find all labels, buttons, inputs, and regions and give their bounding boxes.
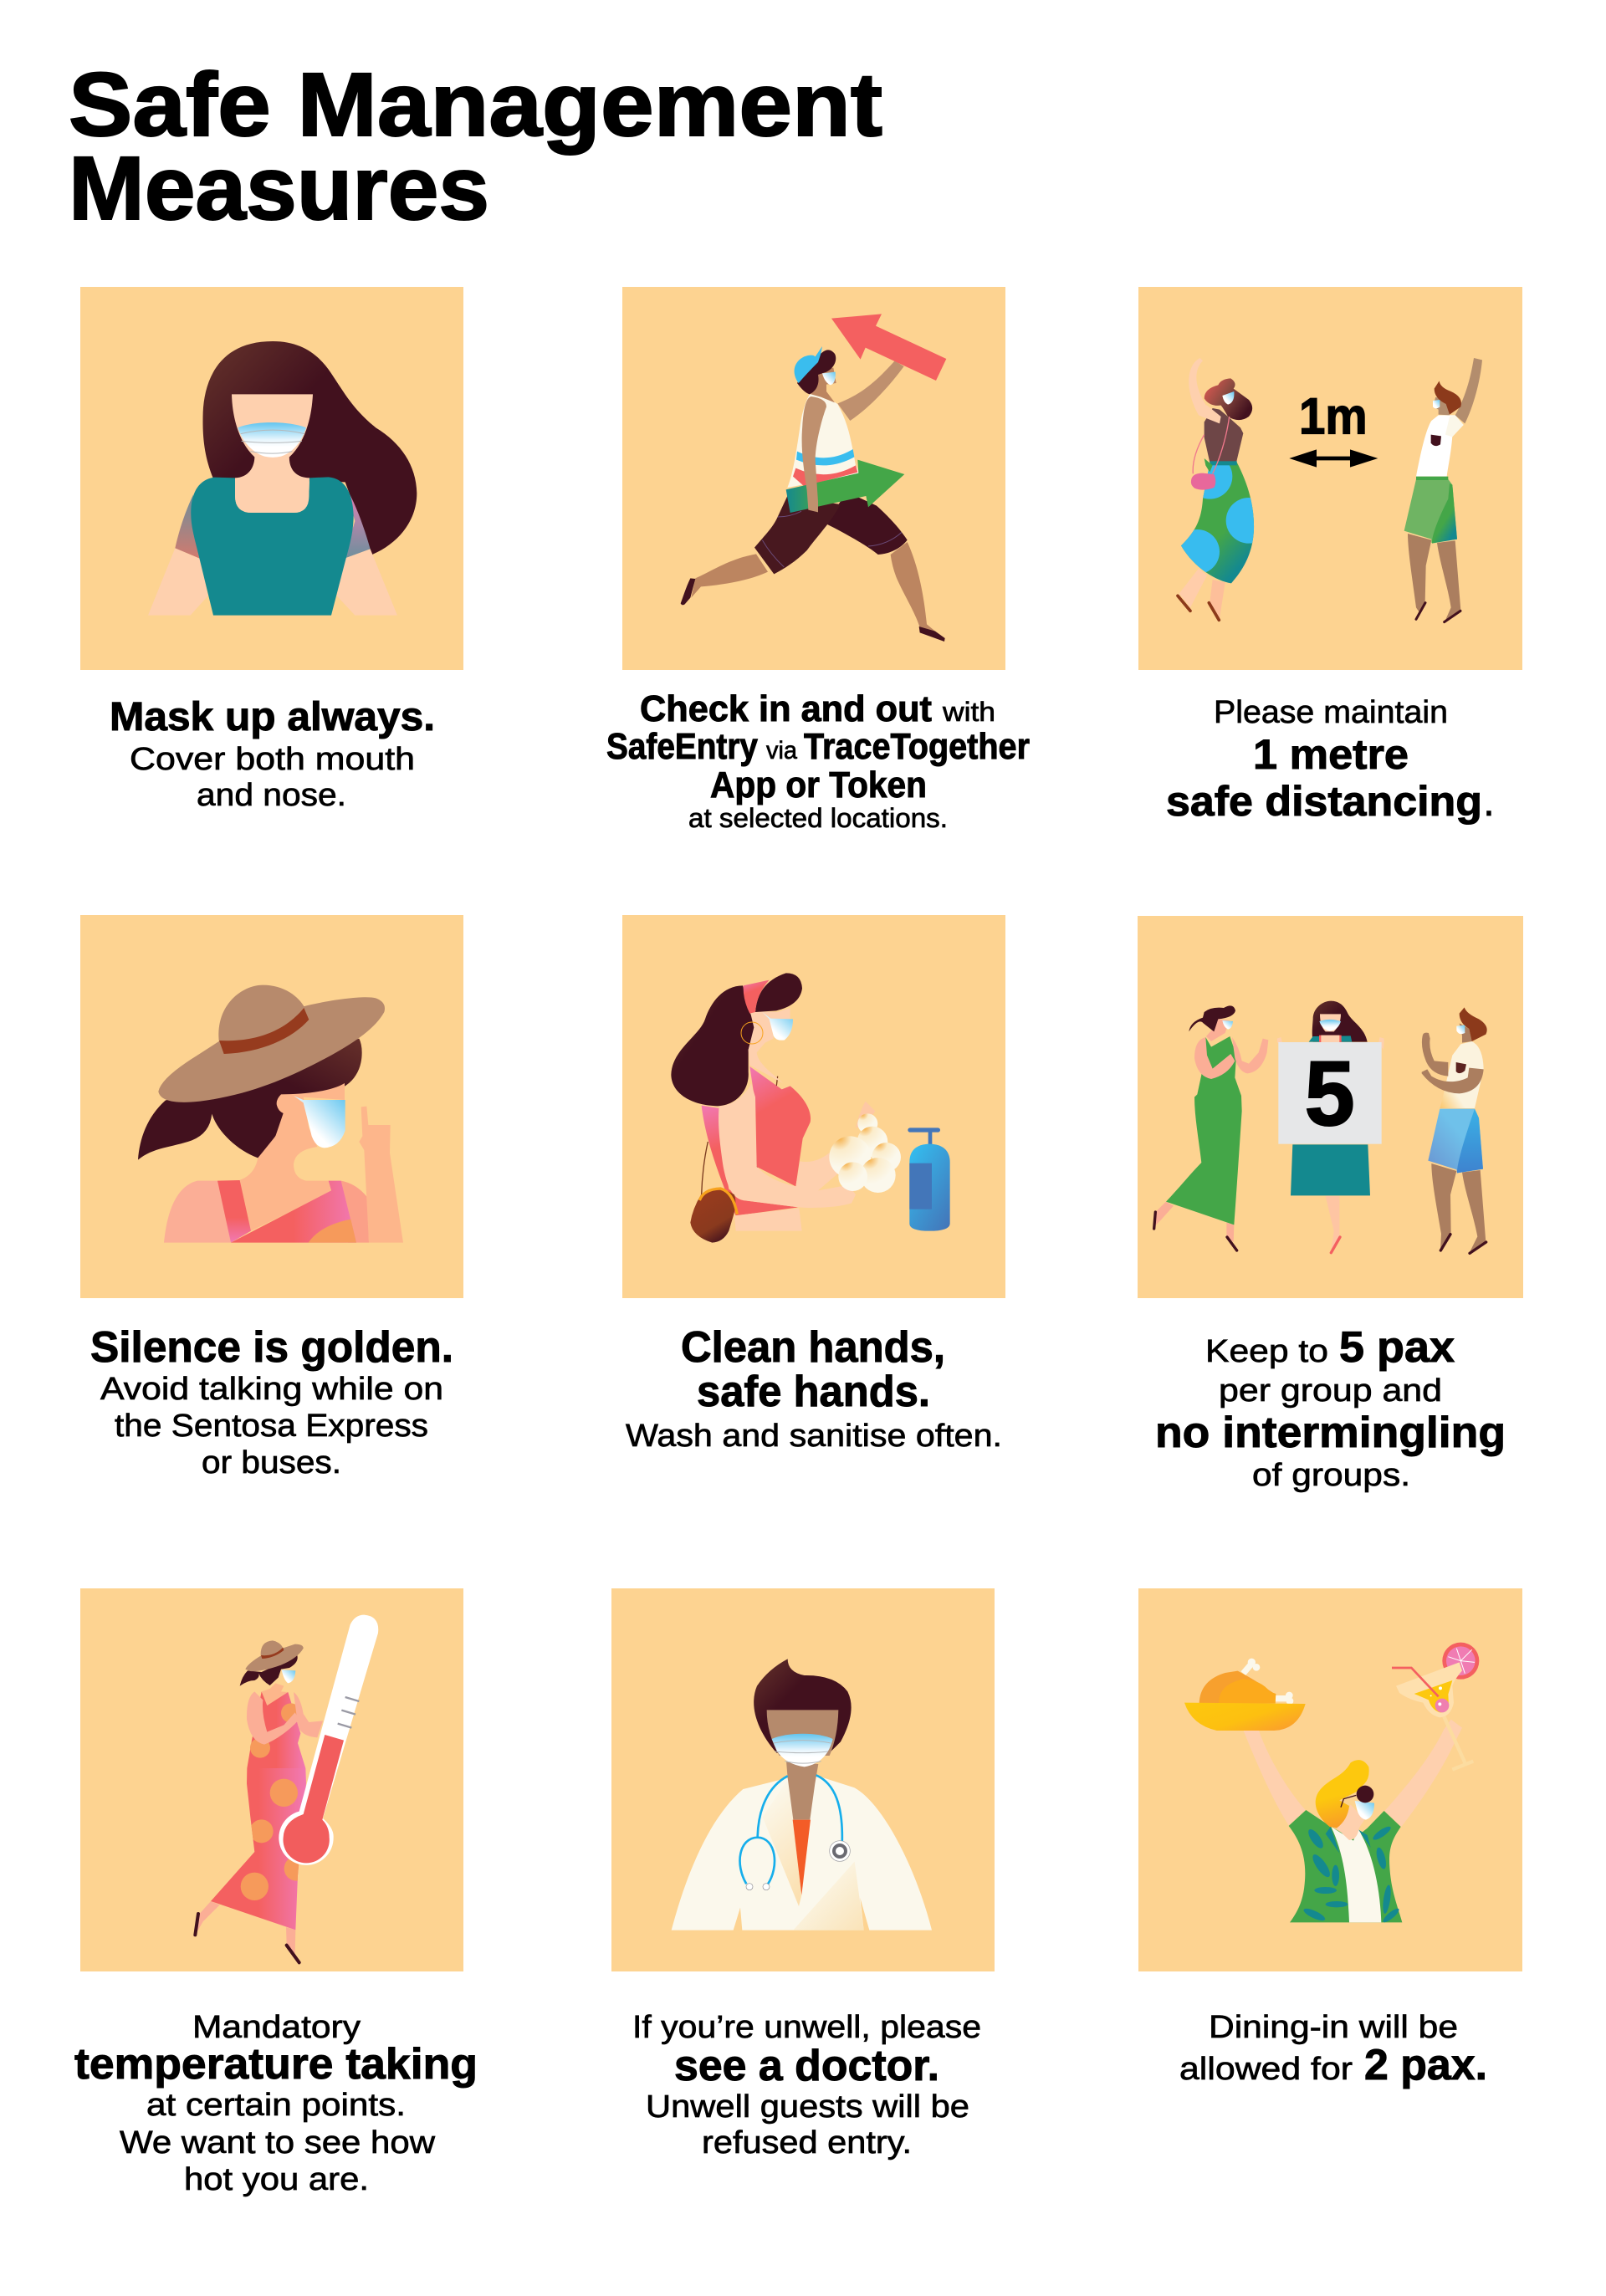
caption: see a doctor: refused entry. xyxy=(702,2125,912,2160)
caption: check in and out: Check in and out xyxy=(640,688,932,729)
caption: mask up xyxy=(110,695,435,813)
title xyxy=(69,54,882,238)
caption: silence is golden xyxy=(90,1323,453,1480)
caption: see a doctor: If you’re unwell, please xyxy=(632,2010,981,2045)
purse xyxy=(690,1189,737,1243)
double-headed arrow xyxy=(1289,449,1378,468)
sign with number 5 xyxy=(1278,1042,1382,1145)
caption: safe distancing xyxy=(1166,695,1495,825)
caption: dining in: allowed for xyxy=(1179,2052,1353,2087)
caption: keep to 5 pax: per group and xyxy=(1219,1373,1442,1409)
caption: keep to 5 pax: Keep to xyxy=(1205,1334,1328,1369)
green arrow xyxy=(786,460,904,513)
caption: silence is golden: or buses. xyxy=(202,1445,341,1480)
illustration: doctor with stethoscope xyxy=(672,1659,932,1930)
sign with number 5: 5 xyxy=(1305,1042,1355,1145)
caption: mask up: Cover both mouth xyxy=(130,742,415,777)
caption: check in and out: App or Token xyxy=(710,764,927,805)
title: Measures xyxy=(69,137,489,238)
illustration: two people one metre apart xyxy=(1175,358,1482,622)
roast chicken xyxy=(1199,1659,1293,1705)
caption: dining in: 2 pax. xyxy=(1364,2041,1487,2089)
caption: see a doctor: Unwell guests will be xyxy=(646,2089,969,2125)
thermometer xyxy=(279,1615,378,1865)
caption: dining in: Dining-in will be xyxy=(1209,2010,1458,2045)
caption: silence is golden: Silence is golden. xyxy=(90,1323,453,1372)
caption: check in and out: at selected locations. xyxy=(688,803,948,833)
illustration: woman wearing mask xyxy=(148,341,417,616)
panel: safe distancing xyxy=(1138,287,1522,825)
illustration: man running with arrows xyxy=(681,314,946,642)
caption: keep to 5 pax: no intermingling xyxy=(1155,1409,1506,1457)
illustration: woman in sun hat with finger raised xyxy=(138,985,403,1243)
cocktail xyxy=(1392,1643,1479,1770)
caption: temperature taking: hot you are. xyxy=(184,2162,369,2197)
illustration: three people with number 5 sign xyxy=(1154,1001,1487,1253)
stethoscope xyxy=(740,1775,850,1890)
caption: silence is golden: Avoid talking while on xyxy=(100,1372,443,1407)
caption: keep to 5 pax: 5 pax xyxy=(1339,1323,1455,1372)
caption: clean hands xyxy=(626,1323,1002,1454)
caption: check in and out: with xyxy=(942,697,995,727)
sanitiser bottle xyxy=(908,1128,950,1231)
caption: safe distancing: safe distancing xyxy=(1166,778,1482,825)
caption: see a doctor xyxy=(632,2010,981,2160)
caption: check in and out: via xyxy=(766,737,797,764)
panel: clean hands xyxy=(622,915,1005,1454)
caption: temperature taking: temperature taking xyxy=(74,2040,478,2089)
caption: check in and out: SafeEntry xyxy=(606,726,758,767)
illustration: woman with giant thermometer xyxy=(195,1615,378,1962)
caption: temperature taking: Mandatory xyxy=(192,2010,361,2045)
title: Safe Management xyxy=(69,54,882,155)
caption: temperature taking xyxy=(74,2010,478,2197)
panel: dining in xyxy=(1138,1588,1522,2089)
illustration: woman washing hands beside sanitiser xyxy=(671,973,950,1243)
panel: mask up xyxy=(80,287,463,813)
caption: mask up: and nose. xyxy=(197,778,346,813)
red arrow xyxy=(831,314,946,381)
illustration: man holding chicken and cocktail xyxy=(1184,1643,1479,1925)
caption: temperature taking: We want to see how xyxy=(120,2125,436,2160)
panel: keep to 5 pax xyxy=(1138,916,1523,1493)
caption: safe distancing: Please maintain xyxy=(1214,695,1448,730)
caption: clean hands: Wash and sanitise often. xyxy=(626,1419,1002,1454)
caption: keep to 5 pax xyxy=(1155,1323,1506,1493)
panel: check in and out xyxy=(606,287,1030,833)
caption: check in and out xyxy=(606,688,1030,833)
caption: mask up: Mask up always. xyxy=(110,695,435,739)
caption: silence is golden: the Sentosa Express xyxy=(115,1409,428,1444)
caption: clean hands: safe hands. xyxy=(697,1368,930,1416)
caption: temperature taking: at certain points. xyxy=(146,2088,406,2123)
panel: silence is golden xyxy=(80,915,463,1480)
caption: check in and out: TraceTogether xyxy=(804,726,1030,767)
foam xyxy=(829,1113,901,1193)
panel: see a doctor xyxy=(611,1588,995,2160)
caption: safe distancing: . xyxy=(1483,778,1495,825)
caption: clean hands: Clean hands, xyxy=(681,1323,945,1372)
caption: safe distancing: 1 metre xyxy=(1253,731,1409,778)
label: 1m: 1m xyxy=(1299,387,1368,445)
panel: temperature taking xyxy=(74,1588,478,2197)
caption: see a doctor: see a doctor. xyxy=(674,2042,939,2090)
caption: dining in xyxy=(1179,2010,1487,2089)
caption: keep to 5 pax: of groups. xyxy=(1252,1458,1410,1493)
